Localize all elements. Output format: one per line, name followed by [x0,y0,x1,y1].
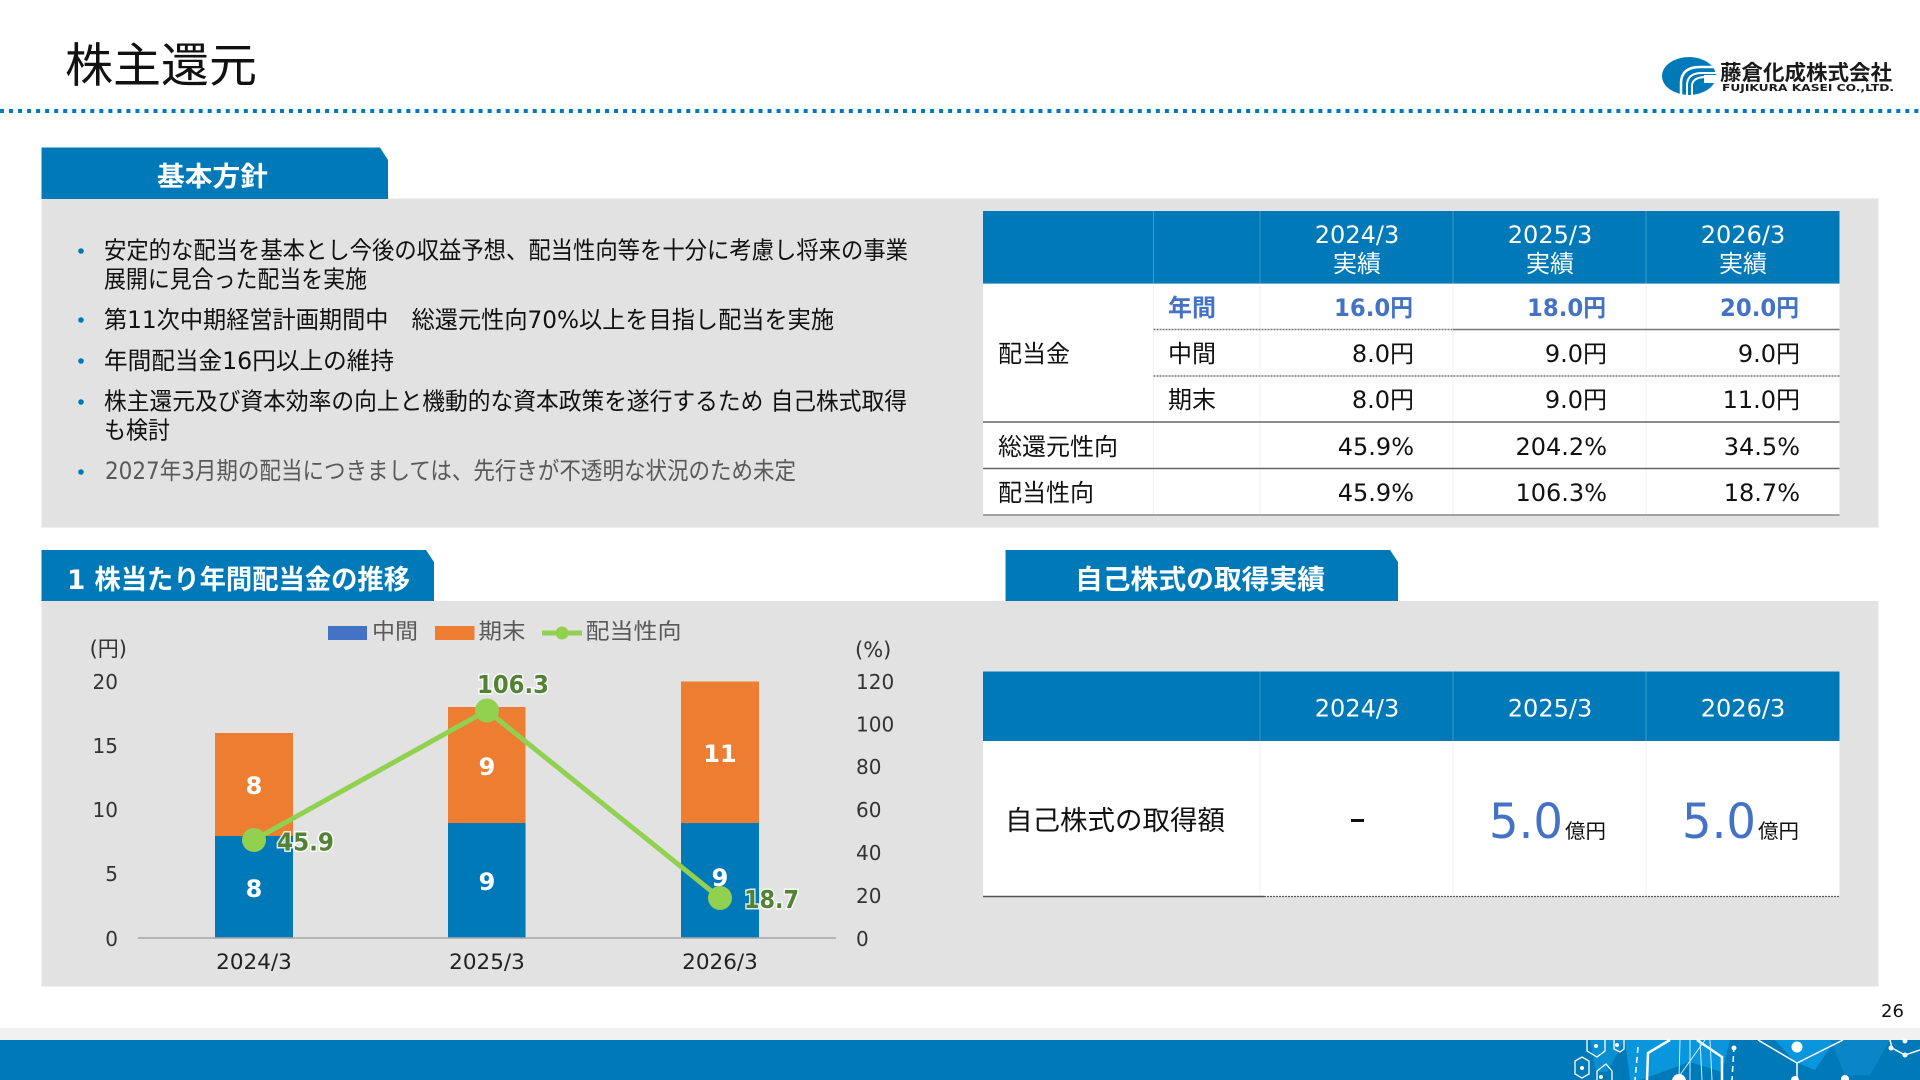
row labels: 総還元性向 [998,433,1118,461]
left axis: (円) [90,637,127,661]
table header row [1315,221,1785,278]
text block: policy bullets: 展開に見合った配当を実施 [104,266,367,294]
annual dividend values: 16.0円 [1334,294,1413,322]
table values: 45.9% [1338,479,1414,507]
text block: policy bullets: 年間配当金16円以上の維持 [104,347,394,375]
bar: 2024/3 [215,733,293,938]
legend: 期末 [478,620,526,645]
text block: policy bullets: 安定的な配当を基本とし今後の収益予想、配当性向等を十分に考慮し将来の事業 [104,236,908,264]
right axis: 40 [856,841,881,865]
right axis: 20 [856,884,881,908]
logo: Fujikura Kasei [1662,57,1894,95]
left axis: 0 [105,927,118,951]
table values: 45.9% [1338,433,1414,461]
bar value labels: 9 [479,868,495,896]
table: share buyback [983,672,1840,896]
buyback header row: 2026/3 [1701,694,1785,722]
logo text: 藤倉化成株式会社 [1720,61,1892,85]
bar: 2026/3 [681,682,759,938]
x axis labels [216,950,758,975]
bar value labels [246,740,737,903]
payout ratio labels: 18.7 [744,885,799,914]
bar: 2025/3 [448,707,526,938]
text block: policy bullets: も検討 [104,416,170,444]
right axis [855,638,894,951]
table header row: 2026/3 [1701,221,1785,249]
annual dividend values [1334,294,1799,322]
heading tab: dividend trend: 1 株当たり年間配当金の推移 [67,565,410,596]
left axis: 10 [93,798,118,822]
heading tab: 基本方針: 基本方針 [157,162,268,193]
buyback values: 億円 [1565,819,1606,843]
table header row: 実績 [1333,250,1381,278]
table values: 18.7% [1724,479,1800,507]
heading tab: 基本方針 [42,148,388,199]
table values: 204.2% [1515,433,1607,461]
payout ratio labels [277,670,799,914]
bar value labels: 8 [246,772,262,800]
legend [328,620,682,645]
left axis: 5 [105,862,118,886]
row labels [998,294,1216,507]
x axis labels: 2025/3 [449,950,525,975]
table: dividends [983,211,1840,515]
right axis: 0 [856,927,869,951]
buyback values: 5.0 [1682,794,1756,850]
bar value labels: 11 [703,740,737,768]
row labels: 配当金 [998,340,1070,368]
logo text: FUJIKURA KASEI CO.,LTD. [1722,83,1894,94]
left axis: 20 [93,670,118,694]
row labels: 期末 [1168,386,1216,414]
annual dividend values: 20.0円 [1720,294,1799,322]
bar value labels: 9 [712,864,728,892]
title: 株主還元 [65,39,257,94]
footer band [0,1028,1920,1080]
table header row: 実績 [1719,250,1767,278]
buyback header row: 2024/3 [1315,694,1399,722]
buyback row label: 自己株式の取得額 [1005,806,1225,837]
buyback values: 5.0 [1489,794,1563,850]
buyback values [1351,794,1799,850]
table header row: 2025/3 [1508,221,1592,249]
chart: dividend per share and payout ratio [90,620,894,975]
bar value labels: 9 [479,753,495,781]
heading tab: share buyback [1006,550,1398,601]
legend: 配当性向 [586,620,682,645]
payout ratio labels: 45.9 [277,828,334,856]
text block: policy bullets: 2027年3月期の配当につきましては、先行きが不透明な状況のため未定 [105,457,796,485]
payout ratio labels: 106.3 [477,670,549,699]
right axis: 60 [856,798,881,822]
panel: bottom grey background [42,601,1878,986]
x axis labels: 2024/3 [216,950,292,975]
text block: policy bullets: 第11次中期経営計画期間中 総還元性向70%以上を目指し配当を実施 [104,306,834,334]
buyback values: 億円 [1758,819,1799,843]
table header row: 2024/3 [1315,221,1399,249]
panel: top grey background [42,198,1878,528]
left axis: 15 [93,734,118,758]
table values: 9.0円 [1545,386,1607,414]
bar value labels: 8 [246,875,262,903]
table values: 106.3% [1515,479,1607,507]
left axis [90,637,127,951]
buyback header row: 2025/3 [1508,694,1592,722]
row labels: 配当性向 [998,479,1094,507]
table values: 8.0円 [1352,386,1414,414]
row labels: 中間 [1168,340,1216,368]
x axis labels: 2026/3 [682,950,758,975]
annual dividend values: 18.0円 [1527,294,1606,322]
heading tab: dividend trend [42,550,434,601]
table values: 11.0円 [1723,386,1800,414]
heading tab: share buyback: 自己株式の取得実績 [1075,565,1325,596]
right axis: 100 [856,712,894,736]
footer circuit decoration [1575,1038,1920,1080]
logo mark [1662,57,1718,95]
table values: 34.5% [1724,433,1800,461]
right axis: 120 [856,670,894,694]
table header row: 実績 [1526,250,1574,278]
right axis: (%) [855,638,891,662]
table values: 9.0円 [1545,340,1607,368]
row labels: 年間 [1168,294,1216,322]
table values: 8.0円 [1352,340,1414,368]
right axis: 80 [856,755,881,779]
table values [1338,340,1800,507]
payout ratio line [242,698,732,910]
text block: policy bullets: 株主還元及び資本効率の向上と機動的な資本政策を遂行するため 自己株式取得 [104,388,907,416]
text block: policy bullets [78,236,908,485]
table values: 9.0円 [1738,340,1800,368]
legend: 中間 [372,620,418,645]
buyback header row [1315,694,1785,722]
page number: 26 [1881,1001,1904,1022]
